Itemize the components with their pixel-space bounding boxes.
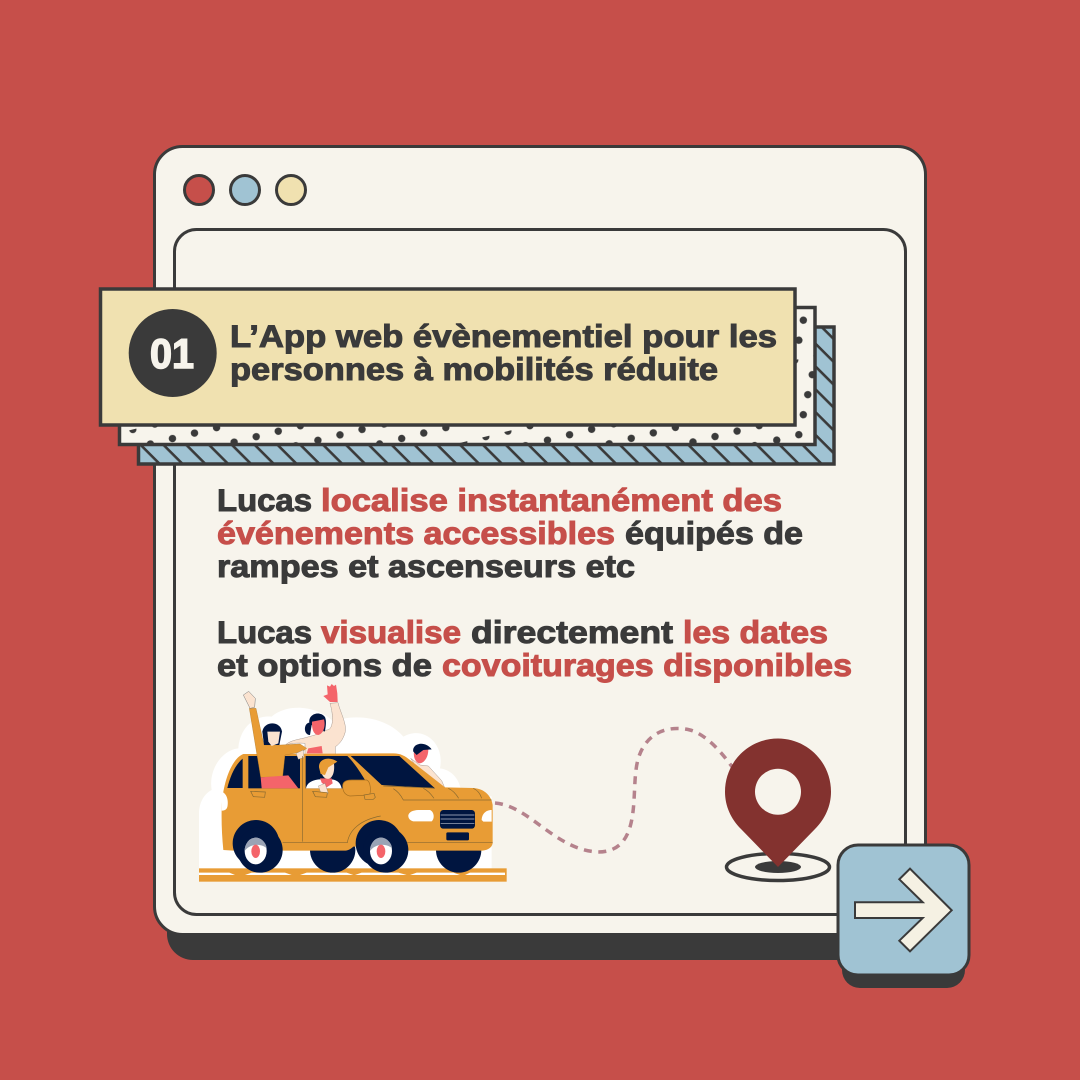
window shadow	[167, 180, 907, 960]
person: driver	[306, 759, 342, 795]
car details	[222, 756, 493, 843]
road	[199, 868, 507, 882]
title: L’App web évènementiel pour les	[230, 318, 777, 354]
car body	[222, 753, 493, 851]
window button: blue	[230, 176, 260, 204]
text block: paragraph 2	[217, 614, 852, 683]
dashed route	[495, 728, 733, 852]
person: man right	[411, 744, 445, 788]
icon: location pin	[725, 738, 831, 880]
white cloud	[199, 708, 492, 870]
window button: yellow	[276, 176, 306, 204]
next button	[838, 845, 969, 975]
number badge	[129, 309, 217, 397]
text block: paragraph 1	[217, 482, 803, 584]
front wheels	[233, 820, 408, 873]
text block: paragraph 2: directement	[471, 614, 674, 650]
title	[230, 318, 777, 387]
text block: paragraph 2: covoiturages disponibles	[442, 647, 852, 683]
pin marker	[725, 738, 831, 867]
pin base shadow	[755, 861, 801, 873]
text block: paragraph 2: et options de	[217, 647, 432, 683]
text block: paragraph 2: les dates	[683, 614, 828, 650]
title: personnes à mobilités réduite	[230, 351, 718, 387]
person: woman in window	[243, 691, 307, 788]
back door window	[248, 756, 300, 788]
hatched back layer	[138, 327, 834, 464]
far wheels	[310, 827, 481, 873]
title banner	[100, 289, 795, 425]
text block: paragraph 1: événements accessibles	[217, 515, 615, 551]
rear window	[227, 759, 243, 788]
illustration: car with passengers	[199, 684, 507, 882]
text block: paragraph 1: Lucas	[217, 482, 312, 518]
front door window	[306, 756, 365, 788]
text block: paragraph 2: visualise	[321, 614, 461, 650]
text block: paragraph 2: Lucas	[217, 614, 312, 650]
number badge: 01	[150, 330, 194, 377]
text block: paragraph 1: localise instantanément des	[321, 482, 782, 518]
icon: arrow	[855, 869, 952, 951]
button shadow	[842, 900, 965, 988]
dotted middle layer	[120, 308, 815, 444]
person: woman behind	[285, 684, 346, 755]
window button: red	[184, 176, 214, 204]
panel: browser window	[154, 146, 926, 934]
text block: paragraph 1: rampes et ascenseurs etc	[217, 548, 635, 584]
pin base ring	[726, 854, 830, 880]
windshield	[351, 756, 435, 788]
text block: paragraph 1: équipés de	[625, 515, 803, 551]
inner content frame	[174, 230, 906, 914]
